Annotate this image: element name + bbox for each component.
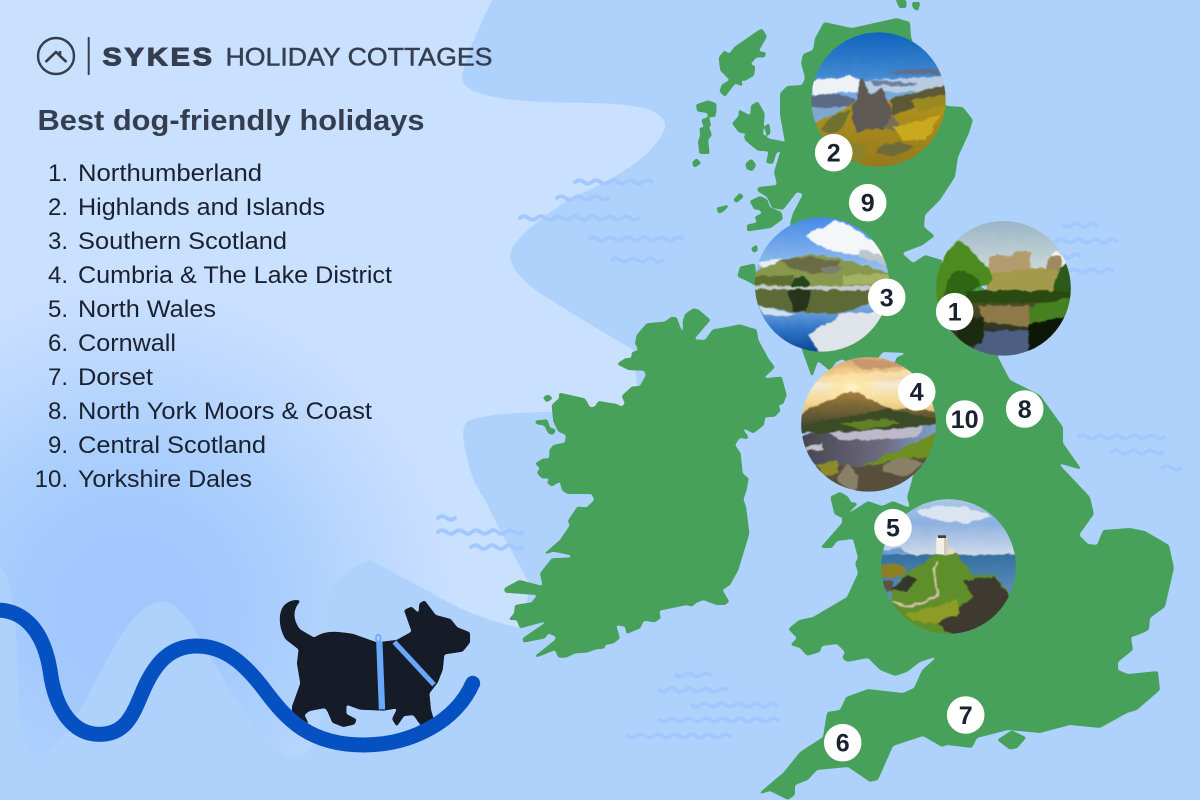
marker 3 [868,278,906,316]
lighthouse [936,535,954,554]
photo 5: North Wales [881,499,1016,634]
heading: Best dog-friendly holidays [38,105,424,137]
marker 3: 3 [880,284,894,312]
marker 9: 9 [861,190,875,218]
ranked list of destinations: 2. [48,194,68,221]
map: Ireland [504,308,787,658]
ranked list of destinations [35,160,392,493]
ranked list of destinations: 5. [48,296,68,323]
ranked list of destinations: 8. [48,398,68,425]
ranked list of destinations: Northumberland [78,160,262,187]
sea waves [438,180,1181,738]
marker 5 [874,509,912,546]
ranked list of destinations: 4. [48,262,68,289]
marker 1: 1 [948,299,962,327]
ranked list of destinations: 7. [48,364,68,391]
marker 8 [1006,390,1044,428]
marker 2 [815,134,852,172]
ranked list of destinations: North York Moors & Coast [78,398,372,425]
marker 6: 6 [836,730,850,758]
ranked list of destinations: 9. [48,432,68,459]
marker 10: 10 [951,406,979,434]
winding blue path [0,610,473,745]
logo: Sykes Holiday Cottages [38,37,492,75]
photo 1: Northumberland [936,221,1071,356]
ranked list of destinations: 3. [48,228,68,255]
map: Scottish islands [692,0,920,287]
background: pale coastal shape [0,0,665,757]
marker 4: 4 [910,379,924,407]
marker 8: 8 [1018,396,1032,424]
marker 5: 5 [886,515,900,543]
marker 1 [936,293,974,331]
ranked list of destinations: 6. [48,330,68,357]
marker 2: 2 [827,140,841,168]
marker 6 [824,724,862,762]
dog silhouette with harness [280,600,470,727]
map: Great Britain mainland [757,18,1174,800]
ranked list of destinations: Dorset [78,364,153,391]
ranked list of destinations: North Wales [78,296,216,323]
ranked list of destinations: Central Scotland [78,432,266,459]
photo 4: Cumbria and The Lake District [801,357,936,492]
logo: Sykes Holiday Cottages: HOLIDAY COTTAGES [226,44,492,72]
marker 7: 7 [959,702,973,730]
marker 9 [849,184,886,222]
marker 4 [898,373,936,411]
ranked list of destinations: 10. [35,466,68,493]
photo 3: Southern Scotland [752,213,893,355]
marker 7 [947,696,984,734]
photo 2: Highlands and Islands [811,32,946,167]
logo: Sykes Holiday Cottages: SYKES [102,43,212,71]
ranked list of destinations: Cumbria & The Lake District [78,262,392,289]
ranked list of destinations: Highlands and Islands [78,194,325,221]
marker 10 [946,400,984,438]
ranked list of destinations: Cornwall [78,330,176,357]
ranked list of destinations: Yorkshire Dales [78,466,252,493]
ranked list of destinations: Southern Scotland [78,228,287,255]
map: Anglesey and Isle of Wight [830,492,1026,750]
ranked list of destinations: 1. [48,160,68,187]
